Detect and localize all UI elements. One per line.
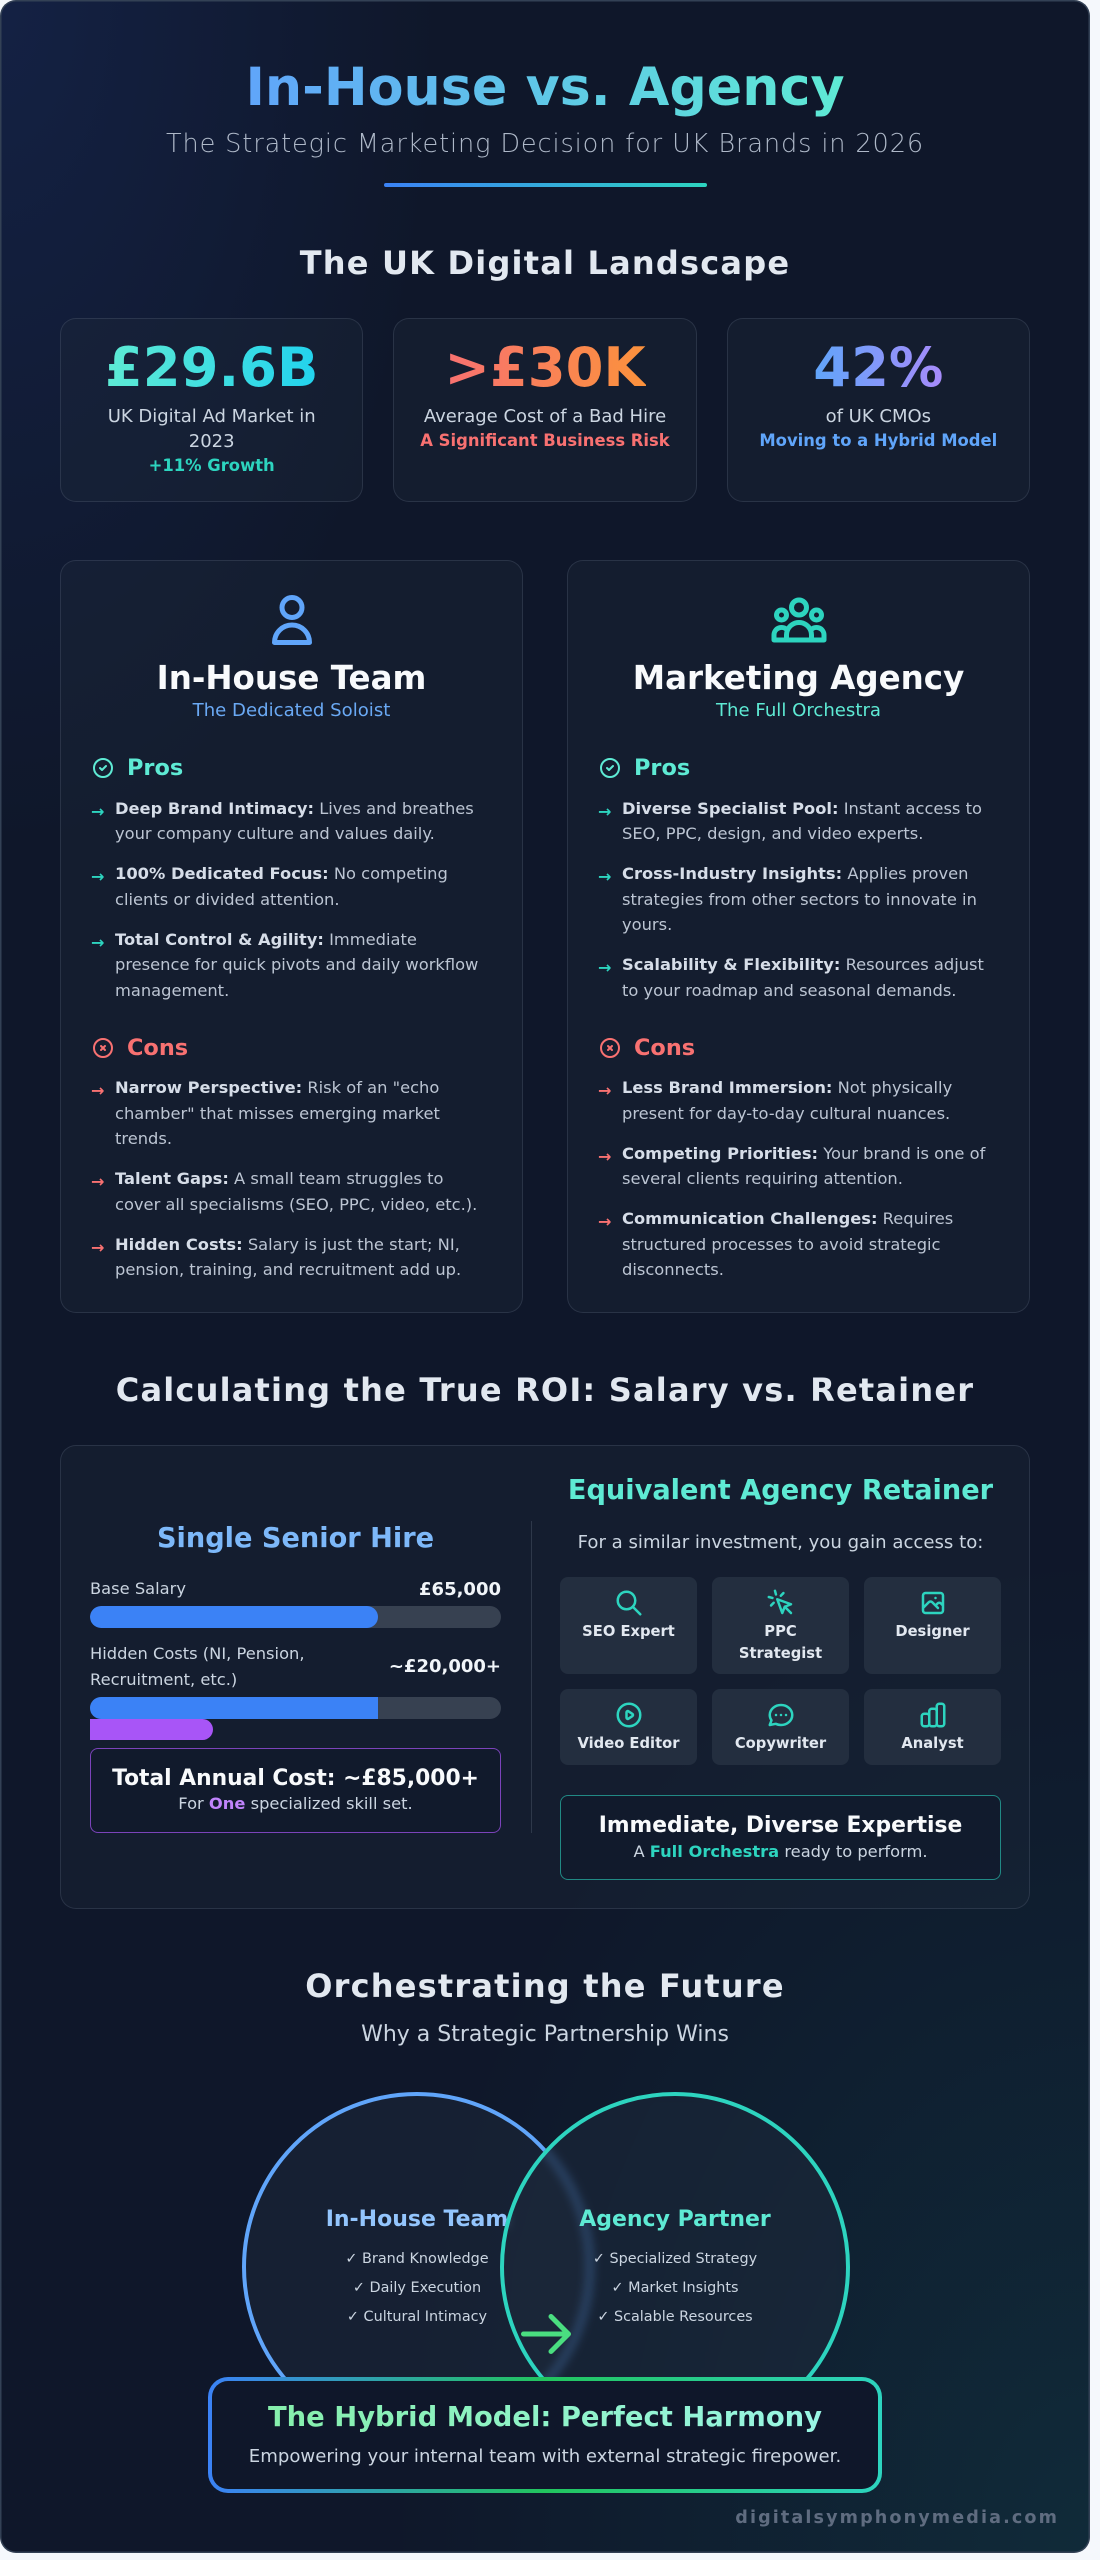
venn: right circle [500,2092,850,2442]
stat note: A Significant Business Risk [420,431,670,450]
pro item: 100% Dedicated Focus: No competing [115,864,448,883]
callout title: Immediate, Diverse Expertise [599,1812,962,1838]
circle list: ✓ Brand Knowledge [345,2251,489,2267]
pro item: your company culture and values daily. [115,824,435,843]
row: base salary: £65,000 [419,1579,501,1600]
pro item: → [598,958,611,977]
pro item: yours. [622,915,672,934]
subheading: future: Why a Strategic Partnership Wins [361,2022,729,2047]
con item: present for day-to-day cultural nuances. [622,1104,950,1123]
pro item: strategies from other sectors to innovate in [622,890,977,909]
circle list: ✓ Cultural Intimacy [347,2309,487,2325]
icon: image [922,1592,944,1614]
circle list: ✓ Daily Execution [353,2280,481,2296]
row: base salary: Base Salary [90,1579,186,1598]
con item [91,1169,477,1214]
icon: check [93,758,113,778]
circle list: ✓ Specialized Strategy [593,2251,757,2267]
pro item: Total Control & Agility: Immediate [115,930,417,948]
pro item: → [91,867,104,886]
heading: UK digital landscape: The UK Digital Landscape [300,244,790,282]
pro item: → [91,802,104,820]
con item: Communication Challenges: Requires [622,1209,953,1228]
total note: For One specialized skill set. [178,1794,413,1813]
circle list: ✓ Scalable Resources [597,2309,753,2325]
pro item: → [598,802,611,820]
pro item [598,864,977,934]
con item: Talent Gaps: A small team struggles to [115,1169,443,1188]
stat label: UK Digital Ad Market in [108,406,316,427]
tile: PPC: Strategist [739,1645,822,1662]
con item [91,1234,461,1279]
row: hidden costs: Recruitment, etc.) [90,1670,237,1688]
con item: Competing Priorities: Your brand is one of [622,1144,985,1162]
bar: hidden costs [90,1697,501,1719]
hybrid note: Empowering your internal team with external strategic firepower. [249,2446,841,2467]
con item [598,1144,986,1188]
pro item: presence for quick pivots and daily workflow [115,955,478,974]
icon: search [616,1590,642,1616]
con item [598,1078,952,1123]
pro item: SEO, PPC, design, and video experts. [622,824,923,843]
callout: total cost [90,1748,501,1833]
row: hidden costs [90,1644,501,1688]
pro item: Diverse Specialist Pool: Instant access to [622,798,982,818]
con item: Hidden Costs: Salary is just the start; NI, [115,1234,460,1254]
stat note: Moving to a Hybrid Model [759,431,997,450]
heading: future: Orchestrating the Future [305,1967,785,2005]
tile: video: Video Editor [578,1735,679,1752]
pros heading: Pros [634,755,690,781]
con item: → [91,1172,104,1191]
venn: left circle [242,2092,592,2442]
pros heading: Pros [127,755,183,781]
stat label: of UK CMOs [826,406,931,427]
tile: copywriter [712,1689,849,1765]
subtitle: The Strategic Marketing Decision for UK Brands in 2026 [166,129,924,159]
heading: ROI: Calculating the True ROI: Salary vs. Retainer [116,1371,974,1409]
icon: check [600,758,620,778]
con item: chamber" that misses emerging market [115,1104,440,1123]
stat number: >£30K [444,336,646,399]
con item [598,1209,953,1279]
con item: structured processes to avoid strategic [622,1235,941,1254]
stat card: bad hire [393,318,697,502]
panel title: In-House Team [157,659,426,697]
tile: video [560,1689,697,1765]
icon: cross [93,1038,113,1058]
con item: → [91,1238,104,1256]
right heading: Equivalent Agency Retainer [568,1475,993,1506]
circle list [345,2251,489,2325]
tile: designer [864,1577,1001,1674]
tile: PPC [712,1577,849,1674]
tile: analyst: Analyst [901,1735,964,1752]
con item: pension, training, and recruitment add up. [115,1260,461,1279]
icon: chat [768,1704,794,1726]
icon: cursor [768,1590,792,1614]
pro item: Scalability & Flexibility: Resources adjust [622,955,984,974]
right intro: For a similar investment, you gain access to: [578,1532,983,1553]
con item: cover all specialisms (SEO, PPC, video, etc.). [115,1195,477,1214]
panel title: Marketing Agency [633,659,964,697]
left heading: Single Senior Hire [157,1522,434,1554]
cons heading: Cons [634,1035,695,1061]
row: hidden costs: Hidden Costs (NI, Pension, [90,1644,305,1663]
pro item [91,864,448,909]
callout note: A Full Orchestra ready to perform. [633,1842,928,1861]
tile: PPC: PPC [764,1623,797,1640]
con item: → [598,1081,611,1100]
circle heading: In-House Team [326,2207,508,2232]
pro item: → [91,932,104,952]
con item: → [598,1212,611,1231]
pro item: Cross-Industry Insights: Applies proven [622,864,968,883]
icon: cross [600,1038,620,1058]
stat number: £29.6B [105,336,318,399]
circle list: ✓ Market Insights [612,2280,738,2296]
stat card: CMOs [727,318,1030,502]
con item: Less Brand Immersion: Not physically [622,1078,952,1097]
stat card: ad market [60,318,363,502]
pro item [91,798,474,843]
tile: copywriter: Copywriter [735,1735,826,1752]
icon: play [616,1702,642,1728]
pro item [598,798,982,843]
con item: disconnects. [622,1260,724,1279]
panel: in-house team [60,560,523,1313]
tile: analyst [864,1689,1001,1765]
icon: bars [920,1702,946,1728]
panel: marketing agency [567,560,1030,1313]
stat note: +11% Growth [149,456,275,475]
cons heading: Cons [127,1035,188,1061]
panel subtitle: The Full Orchestra [716,700,881,721]
pro item: → [598,867,611,886]
panel: ROI comparison [60,1445,1030,1909]
circle list [593,2251,757,2325]
con item: several clients requiring attention. [622,1169,903,1188]
hybrid title: The Hybrid Model: Perfect Harmony [268,2402,822,2433]
row: base salary [90,1579,501,1600]
pro item: Deep Brand Intimacy: Lives and breathes [115,798,474,818]
pro item [598,955,984,1000]
callout: expertise [560,1795,1001,1880]
tile: SEO: SEO Expert [582,1623,675,1640]
bar: hidden costs add-on [90,1719,213,1740]
con item: → [598,1146,611,1166]
pro item: management. [115,981,229,1000]
footer url: digitalsymphonymedia.com [735,2508,1059,2528]
pro item: clients or divided attention. [115,890,340,909]
header divider [384,183,707,187]
bar: base salary [90,1606,501,1628]
con item: Narrow Perspective: Risk of an "echo [115,1078,439,1097]
tile: SEO [560,1577,697,1674]
row: hidden costs: ~£20,000+ [389,1656,501,1677]
title: In-House vs. Agency [245,57,845,118]
con item: trends. [115,1129,172,1148]
icon: person [272,595,312,645]
stat label: 2023 [189,431,235,452]
tile: designer: Designer [895,1623,970,1640]
stat number: 42% [813,336,943,399]
circle heading: Agency Partner [579,2207,771,2232]
stat label: Average Cost of a Bad Hire [424,406,666,427]
con item [91,1078,440,1148]
column divider [531,1521,532,1833]
pro item: to your roadmap and seasonal demands. [622,981,956,1000]
panel subtitle: The Dedicated Soloist [193,700,390,721]
callout: hybrid model [208,2377,882,2493]
icon: group [772,598,826,642]
arrow: to hybrid [521,2314,571,2354]
total text: Total Annual Cost: ~£85,000+ [112,1766,479,1791]
con item: → [91,1081,104,1100]
pro item [91,930,478,1000]
stat label [108,406,316,452]
